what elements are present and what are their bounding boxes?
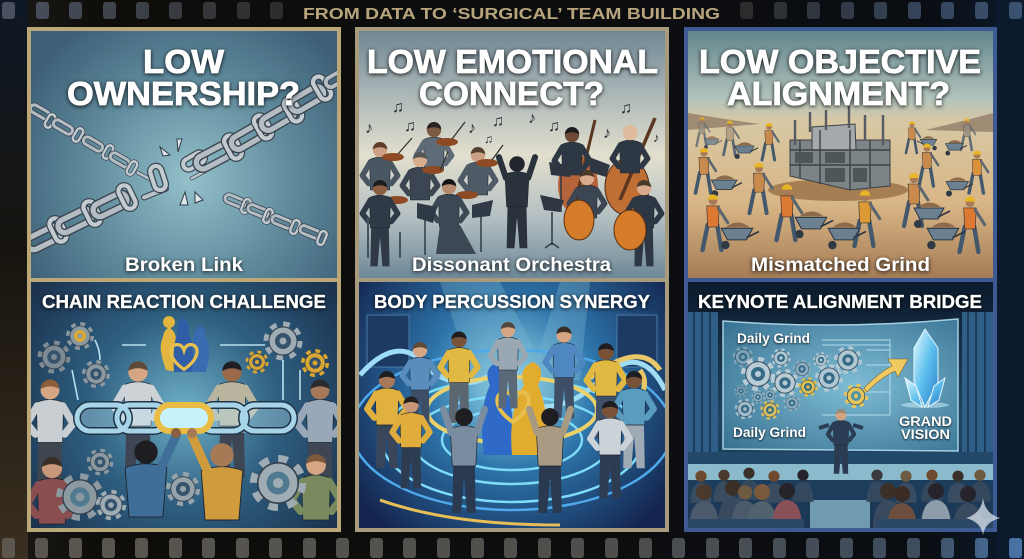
heading: CONNECT? bbox=[419, 75, 604, 112]
heading bbox=[367, 43, 658, 112]
illustration: mismatched grind bbox=[688, 106, 993, 252]
stage curtains bbox=[688, 312, 993, 452]
crystal bbox=[901, 329, 949, 408]
speaker bbox=[819, 409, 863, 474]
stage bbox=[688, 452, 993, 528]
screen labels: VISION bbox=[901, 426, 950, 442]
heading: OWNERSHIP? bbox=[67, 75, 300, 112]
illustration: team joining chain bbox=[27, 316, 343, 524]
glowing chain with gold link bbox=[74, 403, 296, 433]
arrow to vision bbox=[864, 359, 908, 392]
united figures with heart bbox=[482, 362, 547, 455]
illustration: dissonant orchestra: ♫ bbox=[484, 132, 493, 146]
heading: CHAIN REACTION CHALLENGE bbox=[42, 291, 326, 312]
heading: LOW EMOTIONAL bbox=[367, 43, 658, 80]
illustration: dissonant orchestra: ♫ bbox=[392, 99, 404, 116]
workers with wheelbarrows bbox=[696, 117, 988, 252]
icon: sparkle bbox=[966, 498, 1000, 535]
caption: Mismatched Grind bbox=[751, 255, 930, 276]
bottom film perforations bbox=[2, 538, 1022, 558]
illustration: dissonant orchestra: ♪ bbox=[365, 120, 373, 137]
illustration: team clapping in energy rings bbox=[352, 282, 672, 525]
screen gears bbox=[734, 348, 866, 418]
illustration: dissonant orchestra: ♫ bbox=[548, 118, 560, 135]
projection screen bbox=[723, 319, 958, 451]
panel: low ownership bbox=[25, 29, 352, 280]
screen labels: Daily Grind bbox=[737, 330, 810, 346]
panel: keynote alignment bridge bbox=[686, 280, 995, 532]
illustration: dissonant orchestra: ♪ bbox=[468, 120, 476, 137]
heading bbox=[699, 43, 981, 112]
illustration: dissonant orchestra: ♪ bbox=[603, 125, 611, 142]
illustration: dissonant orchestra: ♫ bbox=[404, 118, 416, 135]
heading: KEYNOTE ALIGNMENT BRIDGE bbox=[698, 291, 982, 312]
panel: body percussion synergy bbox=[352, 280, 672, 530]
caption: Broken Link bbox=[125, 255, 243, 276]
heading: BODY PERCUSSION SYNERGY bbox=[374, 291, 651, 312]
illustration: dissonant orchestra: ♫ bbox=[620, 100, 632, 117]
heading bbox=[67, 43, 300, 112]
illustration: dissonant orchestra bbox=[362, 99, 662, 266]
illustration: dissonant orchestra: ♫ bbox=[492, 113, 504, 130]
team heart emblem bbox=[161, 316, 209, 372]
panel: low objective alignment bbox=[686, 29, 995, 280]
screen labels: GRAND bbox=[899, 413, 952, 429]
title: FROM DATA TO ‘SURGICAL’ TEAM BUILDING bbox=[303, 6, 720, 23]
screen labels: Daily Grind bbox=[733, 424, 806, 440]
caption: Dissonant Orchestra bbox=[412, 255, 611, 276]
illustration: dissonant orchestra: ♪ bbox=[528, 110, 536, 127]
panel: low emotional connect bbox=[357, 29, 667, 280]
unfinished concrete building bbox=[768, 106, 908, 201]
heading: LOW OBJECTIVE bbox=[699, 43, 981, 80]
heading: LOW bbox=[143, 43, 225, 80]
panel: chain reaction challenge bbox=[27, 280, 343, 530]
illustration: dissonant orchestra: ♪ bbox=[653, 130, 660, 145]
illustration: broken chains bbox=[25, 67, 352, 252]
top film perforations bbox=[2, 2, 1022, 19]
audience bbox=[688, 468, 993, 532]
heading: ALIGNMENT? bbox=[727, 75, 950, 112]
screen labels bbox=[733, 330, 952, 442]
illustration: keynote stage bbox=[688, 312, 993, 532]
